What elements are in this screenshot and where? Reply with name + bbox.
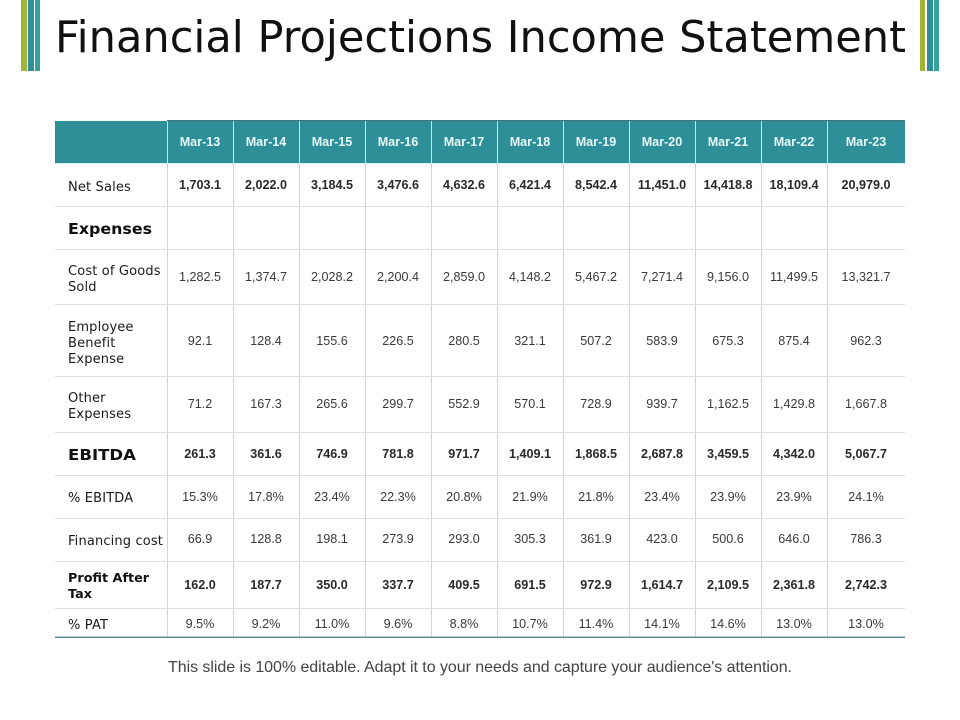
- row: profit after tax: [68, 571, 887, 602]
- row: cost of goods sold: [68, 264, 891, 295]
- row: cost of goods sold: 13,321.7: [841, 270, 891, 284]
- table header band: Mar-14: [246, 135, 286, 149]
- row: ebitda: [68, 446, 887, 464]
- row: ebitda: 5,067.7: [845, 447, 887, 461]
- row: cost of goods sold: 5,467.2: [575, 270, 617, 284]
- row: other expenses: Expenses: [68, 407, 131, 422]
- row: other expenses: 939.7: [646, 397, 678, 411]
- row: percent ebitda: 20.8%: [446, 490, 482, 504]
- row: financing cost: 293.0: [448, 532, 480, 546]
- row: financing cost: 198.1: [316, 532, 348, 546]
- row: profit after tax: 2,742.3: [845, 578, 887, 592]
- row: other expenses: 1,429.8: [773, 397, 815, 411]
- row: cost of goods sold: 2,200.4: [377, 270, 419, 284]
- row: percent ebitda: 24.1%: [848, 490, 884, 504]
- row: financing cost: [68, 532, 882, 549]
- row: percent pat: % PAT: [68, 618, 108, 633]
- row: other expenses: [68, 391, 887, 422]
- row: ebitda: 2,687.8: [641, 447, 683, 461]
- row: net sales: 11,451.0: [638, 178, 686, 192]
- row: net sales: 3,184.5: [311, 178, 353, 192]
- row: other expenses: 552.9: [448, 397, 480, 411]
- row: profit after tax: 972.9: [580, 578, 612, 592]
- row: net sales: 18,109.4: [769, 178, 819, 192]
- row: other expenses: 299.7: [382, 397, 414, 411]
- row: percent pat: 8.8%: [450, 617, 478, 631]
- row: net sales: Net Sales: [68, 180, 131, 195]
- row: cost of goods sold: Sold: [68, 280, 97, 295]
- row: profit after tax: 1,614.7: [641, 578, 683, 592]
- row: percent pat: 11.4%: [579, 617, 613, 631]
- table header band: Mar-18: [510, 135, 550, 149]
- row: employee benefit expense: 321.1: [514, 334, 546, 348]
- table header band: Mar-21: [708, 135, 748, 149]
- row: ebitda: 3,459.5: [707, 447, 749, 461]
- row: ebitda: 1,409.1: [509, 447, 551, 461]
- row: other expenses: 1,162.5: [707, 397, 749, 411]
- row: financing cost: 273.9: [382, 532, 414, 546]
- row: profit after tax: 409.5: [448, 578, 480, 592]
- row: cost of goods sold: 9,156.0: [707, 270, 749, 284]
- row: cost of goods sold: 2,028.2: [311, 270, 353, 284]
- table header band: Mar-23: [846, 135, 886, 149]
- row: percent ebitda: 22.3%: [380, 490, 416, 504]
- row: ebitda: 4,342.0: [773, 447, 815, 461]
- row: financing cost: 66.9: [188, 532, 212, 546]
- table header band: Mar-20: [642, 135, 682, 149]
- row: financing cost: 361.9: [580, 532, 612, 546]
- left title accent bars: [21, 0, 40, 71]
- row: cost of goods sold: 2,859.0: [443, 270, 485, 284]
- row: employee benefit expense: 280.5: [448, 334, 480, 348]
- row: percent pat: [68, 617, 884, 633]
- row: profit after tax: 350.0: [316, 578, 348, 592]
- row: expenses heading: Expenses: [68, 220, 152, 238]
- table header band: Mar-22: [774, 135, 814, 149]
- row: employee benefit expense: 583.9: [646, 334, 678, 348]
- row: other expenses: 167.3: [250, 397, 282, 411]
- row: percent ebitda: [68, 490, 884, 506]
- row: other expenses: 728.9: [580, 397, 612, 411]
- row: percent pat: 9.6%: [384, 617, 412, 631]
- row: percent pat: 13.0%: [848, 617, 884, 631]
- row: net sales: 1,703.1: [179, 178, 221, 192]
- row: ebitda: EBITDA: [68, 446, 136, 464]
- table header band: Mar-19: [576, 135, 616, 149]
- row: percent pat: 14.6%: [710, 617, 746, 631]
- row: percent ebitda: 23.9%: [710, 490, 746, 504]
- row: percent pat: 9.5%: [186, 617, 214, 631]
- row: percent ebitda: 23.4%: [644, 490, 680, 504]
- row: financing cost: 646.0: [778, 532, 810, 546]
- row: employee benefit expense: 675.3: [712, 334, 744, 348]
- row: ebitda: 971.7: [448, 447, 480, 461]
- row: other expenses: Other: [68, 391, 106, 406]
- row: net sales: 2,022.0: [245, 178, 287, 192]
- row: percent pat: 9.2%: [252, 617, 280, 631]
- table header band: [55, 120, 905, 164]
- row: financing cost: 128.8: [250, 532, 282, 546]
- row: percent ebitda: % EBITDA: [68, 491, 133, 506]
- row: percent ebitda: 17.8%: [248, 490, 284, 504]
- row: cost of goods sold: Cost of Goods: [68, 264, 161, 279]
- row: employee benefit expense: 92.1: [188, 334, 212, 348]
- row: profit after tax: 337.7: [382, 578, 414, 592]
- income statement table: [55, 120, 905, 638]
- row: cost of goods sold: 1,374.7: [245, 270, 287, 284]
- row: cost of goods sold: 11,499.5: [770, 270, 818, 284]
- row: net sales: 6,421.4: [509, 178, 551, 192]
- row: net sales: 3,476.6: [377, 178, 419, 192]
- row: percent ebitda: 21.8%: [578, 490, 614, 504]
- row: financing cost: 305.3: [514, 532, 546, 546]
- table header band: Mar-13: [180, 135, 220, 149]
- row: employee benefit expense: Expense: [68, 352, 124, 367]
- row: profit after tax: 691.5: [514, 578, 546, 592]
- row: employee benefit expense: 155.6: [316, 334, 348, 348]
- row: employee benefit expense: Benefit: [68, 336, 116, 351]
- row: ebitda: 361.6: [250, 447, 282, 461]
- row: other expenses: 570.1: [514, 397, 546, 411]
- row: percent ebitda: 23.9%: [776, 490, 812, 504]
- row: ebitda: 1,868.5: [575, 447, 617, 461]
- row: employee benefit expense: Employee: [68, 320, 134, 335]
- row: profit after tax: 187.7: [250, 578, 282, 592]
- row: employee benefit expense: 226.5: [382, 334, 414, 348]
- row: percent ebitda: 15.3%: [182, 490, 218, 504]
- row: profit after tax: 162.0: [184, 578, 216, 592]
- row: cost of goods sold: 7,271.4: [641, 270, 683, 284]
- row: employee benefit expense: 962.3: [850, 334, 882, 348]
- row: other expenses: 1,667.8: [845, 397, 887, 411]
- row: ebitda: 261.3: [184, 447, 216, 461]
- row: profit after tax: 2,109.5: [707, 578, 749, 592]
- row: financing cost: 423.0: [646, 532, 678, 546]
- row: percent pat: 13.0%: [776, 617, 812, 631]
- row: percent ebitda: 23.4%: [314, 490, 350, 504]
- row: ebitda: 746.9: [316, 447, 348, 461]
- row: profit after tax: Profit After: [68, 571, 150, 586]
- row: net sales: 8,542.4: [575, 178, 617, 192]
- row: cost of goods sold: 4,148.2: [509, 270, 551, 284]
- row: employee benefit expense: 128.4: [250, 334, 282, 348]
- row: employee benefit expense: 875.4: [778, 334, 810, 348]
- table header band: Mar-17: [444, 135, 484, 149]
- row: percent pat: 10.7%: [512, 617, 548, 631]
- row: profit after tax: Tax: [68, 587, 93, 602]
- title: Financial Projections Income Statement: [55, 12, 906, 63]
- row: net sales: 4,632.6: [443, 178, 485, 192]
- table header band: Mar-16: [378, 135, 418, 149]
- row: net sales: 14,418.8: [703, 178, 753, 192]
- row: other expenses: 71.2: [188, 397, 212, 411]
- row: net sales: [68, 178, 891, 195]
- row: percent pat: 11.0%: [315, 617, 349, 631]
- row: employee benefit expense: [68, 320, 882, 367]
- row: financing cost: 500.6: [712, 532, 744, 546]
- row: financing cost: Financing cost: [68, 534, 163, 549]
- row: financing cost: 786.3: [850, 532, 882, 546]
- row: percent pat: 14.1%: [644, 617, 680, 631]
- row: other expenses: 265.6: [316, 397, 348, 411]
- row: percent ebitda: 21.9%: [512, 490, 548, 504]
- footer note: This slide is 100% editable. Adapt it to your needs and capture your audience's attention.: [168, 659, 792, 676]
- row: net sales: 20,979.0: [841, 178, 891, 192]
- row: cost of goods sold: 1,282.5: [179, 270, 221, 284]
- table header band: Mar-15: [312, 135, 352, 149]
- row: employee benefit expense: 507.2: [580, 334, 612, 348]
- row: ebitda: 781.8: [382, 447, 414, 461]
- row: profit after tax: 2,361.8: [773, 578, 815, 592]
- right title accent bars: [920, 0, 939, 71]
